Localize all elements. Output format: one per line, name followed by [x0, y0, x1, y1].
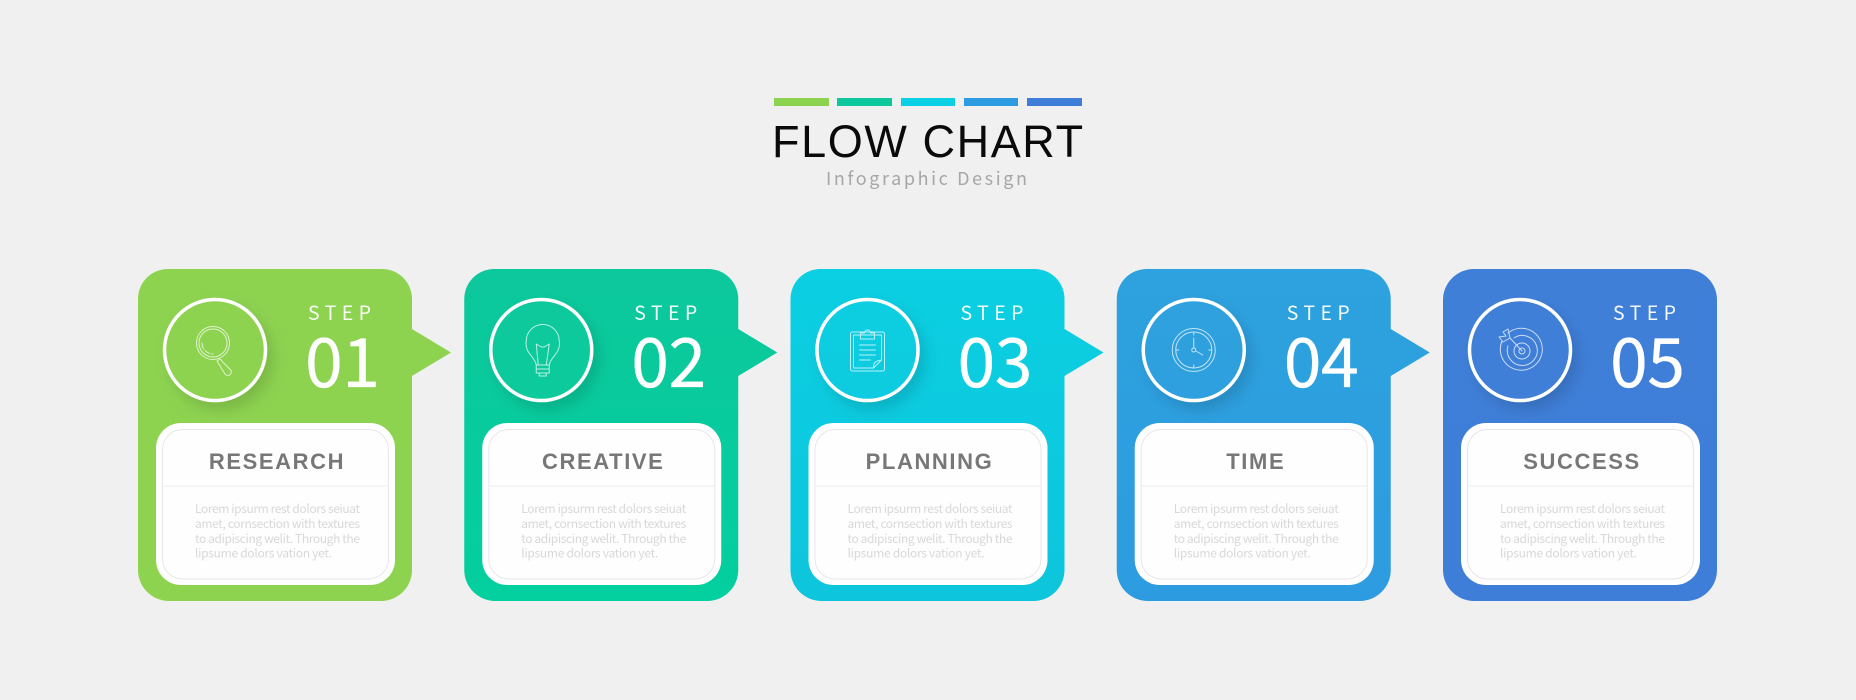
card shape with arrow	[138, 269, 451, 601]
panel: step 1 research	[138, 269, 451, 601]
icon circle	[1470, 300, 1570, 400]
box heading: PLANNING	[866, 449, 993, 474]
box body text: amet, cornsection with textures	[1174, 515, 1339, 532]
step number: 01	[305, 308, 380, 407]
step label: STEP	[308, 297, 371, 326]
title block	[772, 98, 1085, 191]
step number: 04	[1284, 308, 1359, 407]
box body text	[195, 500, 360, 562]
subtitle: Infographic Design	[826, 165, 1027, 191]
step number: 02	[631, 308, 706, 407]
step number: 03	[958, 308, 1032, 407]
box body text: lipsume dolors vation yet.	[195, 544, 332, 562]
box body text: lipsume dolors vation yet.	[521, 544, 658, 562]
step label: STEP	[634, 297, 697, 326]
step label: STEP	[1287, 297, 1350, 326]
box body text: to adipiscing welit. Through the	[1500, 530, 1665, 547]
box body text	[521, 500, 687, 562]
icon circle	[1143, 300, 1244, 400]
icon: target with arrow	[1499, 328, 1542, 370]
panel: step 3 planning	[790, 269, 1104, 601]
box heading: CREATIVE	[542, 449, 664, 474]
box heading: SUCCESS	[1523, 449, 1641, 474]
colour bars	[774, 98, 1082, 106]
icon circle	[164, 300, 266, 400]
box body text: lipsume dolors vation yet.	[1500, 544, 1637, 562]
box body text: Lorem ipsurm rest dolors seiuat	[195, 500, 360, 517]
panel: step 2 creative	[464, 269, 777, 601]
box body text: Lorem ipsurm rest dolors seiuat	[1174, 500, 1339, 517]
icon: clock	[1172, 328, 1215, 372]
card shape	[1443, 269, 1717, 601]
icon circle	[491, 300, 592, 400]
box body text: to adipiscing welit. Through the	[1174, 530, 1339, 547]
box body text: Lorem ipsurm rest dolors seiuat	[521, 500, 687, 517]
panel: step 4 time	[1117, 269, 1430, 601]
box heading: RESEARCH	[209, 449, 345, 474]
box body text	[1174, 500, 1339, 562]
icon: clipboard	[850, 330, 884, 371]
panel: step 5 success	[1443, 269, 1717, 601]
box body text: lipsume dolors vation yet.	[848, 544, 984, 562]
box heading: TIME	[1226, 449, 1285, 474]
step number: 05	[1610, 308, 1685, 407]
box body text: to adipiscing welit. Through the	[848, 530, 1013, 547]
icon: light bulb	[526, 324, 559, 376]
box body text: Lorem ipsurm rest dolors seiuat	[1500, 500, 1665, 517]
box body text: to adipiscing welit. Through the	[521, 530, 687, 547]
title: FLOW CHART	[772, 116, 1085, 167]
text box	[482, 423, 721, 585]
box body text: amet, cornsection with textures	[195, 515, 360, 532]
step label: STEP	[1613, 297, 1676, 326]
box body text	[1500, 500, 1665, 562]
card shape with arrow	[790, 269, 1104, 601]
box body text: amet, cornsection with textures	[848, 515, 1013, 532]
box body text: amet, cornsection with textures	[521, 515, 687, 532]
text box	[1135, 423, 1374, 585]
step label: STEP	[960, 297, 1024, 326]
text box	[1461, 423, 1700, 585]
card shape with arrow	[1117, 269, 1430, 601]
box body text: amet, cornsection with textures	[1500, 515, 1665, 532]
box body text: to adipiscing welit. Through the	[195, 530, 360, 547]
icon: magnifier	[196, 326, 231, 375]
box body text: lipsume dolors vation yet.	[1174, 544, 1311, 562]
text box	[808, 423, 1048, 585]
box body text	[848, 500, 1013, 562]
box body text: Lorem ipsurm rest dolors seiuat	[848, 500, 1013, 517]
icon circle	[817, 300, 918, 400]
text box	[156, 423, 395, 585]
card shape with arrow	[464, 269, 777, 601]
